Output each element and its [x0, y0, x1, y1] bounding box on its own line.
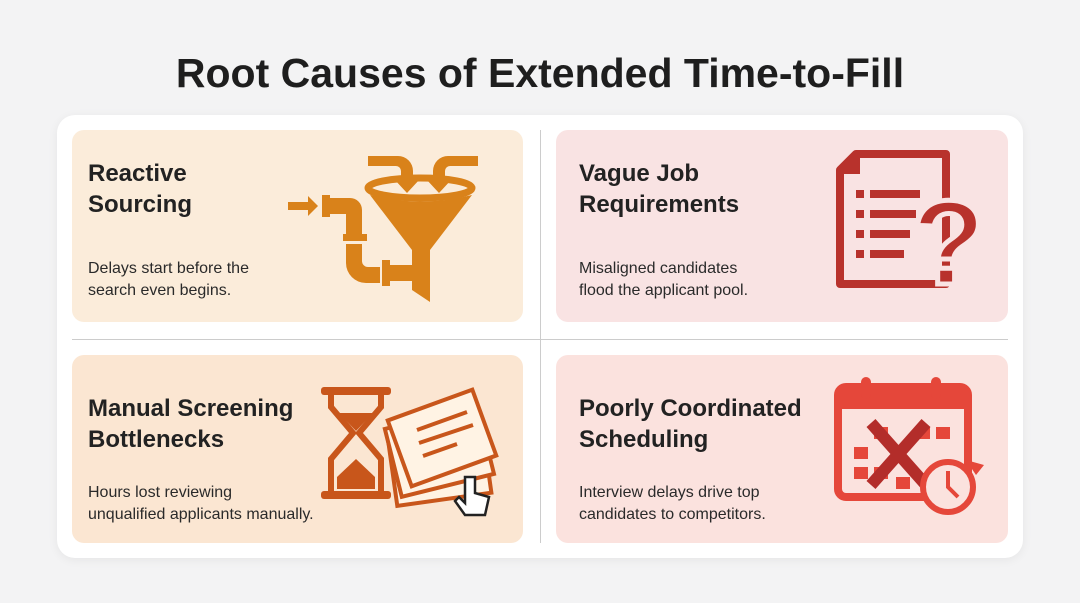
panel: reactive sourcing: Delays start before the — [88, 260, 249, 277]
panel: vague job requirements: Requirements — [579, 191, 739, 218]
panel: reactive sourcing: Sourcing — [88, 191, 192, 218]
panel: scheduling: candidates to competitors. — [579, 506, 766, 523]
panel: scheduling: Scheduling — [579, 426, 708, 453]
panel: manual screening: Hours lost reviewing — [88, 484, 232, 501]
icon: calendar with x and clock — [834, 377, 984, 515]
panel: vague job requirements: Vague Job — [579, 160, 699, 187]
panel: scheduling: Interview delays drive top — [579, 484, 760, 501]
panel: manual screening: Bottlenecks — [88, 426, 224, 453]
panel: manual screening: Manual Screening — [88, 395, 293, 422]
panel: vague job requirements: flood the applicant pool. — [579, 282, 748, 299]
icon: funnel and pipe — [288, 156, 478, 302]
title: Root Causes of Extended Time-to-Fill — [176, 50, 904, 96]
panel: scheduling — [556, 355, 1008, 543]
panel: reactive sourcing: Reactive — [88, 160, 187, 187]
panel: vague job requirements: Misaligned candidates — [579, 260, 737, 277]
panel: manual screening: unqualified applicants manually. — [88, 506, 314, 523]
panel: reactive sourcing — [72, 130, 523, 322]
card container — [57, 115, 1023, 558]
panel: vague job requirements — [556, 130, 1008, 322]
panel: scheduling: Poorly Coordinated — [579, 395, 802, 422]
panel: manual screening — [72, 355, 523, 543]
icon: hourglass and resumes — [321, 387, 499, 516]
panel: reactive sourcing: search even begins. — [88, 282, 231, 299]
icon: document with question mark — [836, 150, 985, 300]
